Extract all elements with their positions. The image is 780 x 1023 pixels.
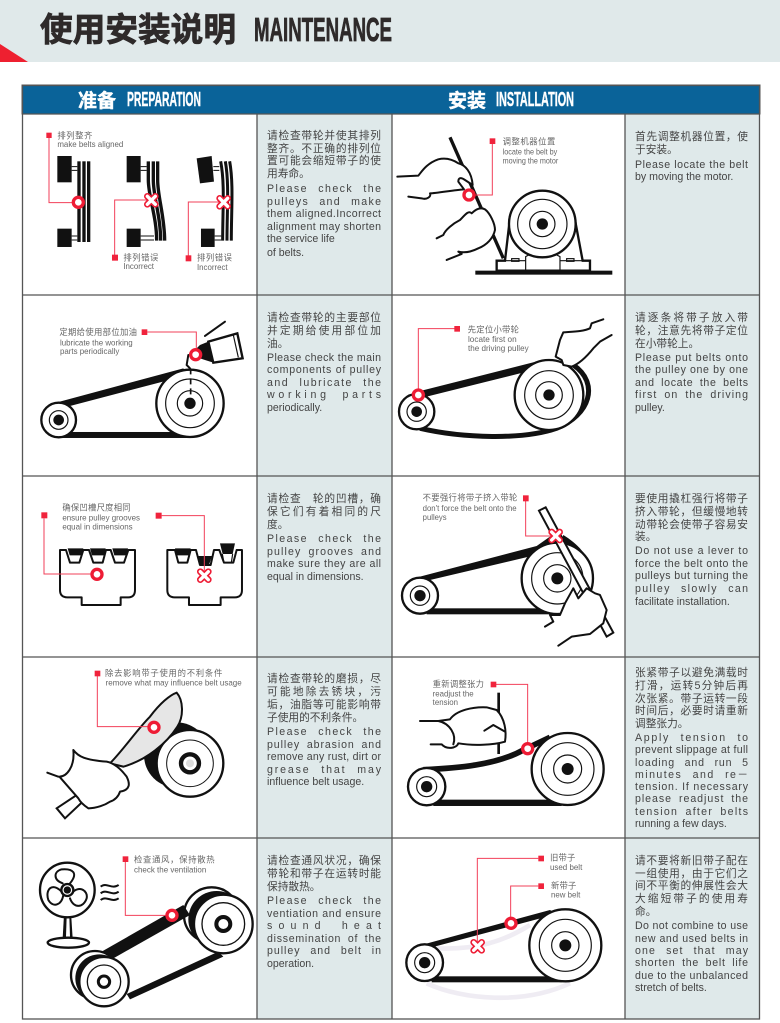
- callouts: new belt: [551, 890, 581, 900]
- belt and pulleys: [406, 909, 601, 982]
- text: installation step 4: tension after belts: [635, 806, 748, 818]
- text: preparation step 4: 请检查带轮的磨损，尽: [267, 672, 381, 685]
- callout: [95, 668, 242, 732]
- callouts: 旧带子: [550, 853, 575, 863]
- callout: don't force the belt onto the: [423, 503, 517, 513]
- text: preparation step 4: pulley abrasion and: [267, 739, 381, 751]
- text: installation step 4: loading and run 5: [635, 757, 748, 769]
- top banner: [0, 0, 780, 62]
- callout: [123, 855, 215, 920]
- belt and pulleys: [41, 368, 224, 438]
- text: installation step 3: 装。: [635, 530, 656, 543]
- text: installation step 3: [635, 492, 748, 608]
- upper hand: [397, 159, 473, 199]
- text: installation step 5: 大缩短带子的使用寿: [635, 892, 748, 905]
- heading: preparation: [78, 89, 201, 112]
- text: installation step 1: 于安装。: [635, 143, 678, 156]
- diagram: aligned: [57, 156, 90, 247]
- illustration: do not mix used and new belts: [406, 853, 601, 998]
- text: preparation step 5: Please check the: [267, 895, 381, 907]
- text: installation step 4: running a few days.: [635, 818, 727, 830]
- text: preparation step 4: influence belt usage.: [267, 776, 364, 788]
- text: installation step 5: new and used belts in: [635, 933, 748, 945]
- callout: readjust the: [433, 689, 474, 699]
- callout label: 排列整齐: [57, 131, 93, 141]
- hand and handle: [47, 750, 129, 818]
- text: preparation step 4: Please check the: [267, 726, 381, 738]
- red corner triangle: [0, 44, 28, 62]
- callout: 检查通风，保持散热: [134, 855, 215, 865]
- pulleys: [144, 722, 223, 797]
- illustration: make belts aligned: 排列错误: [197, 253, 233, 263]
- text: installation step 5: due to the unbalanced: [635, 970, 748, 982]
- text: installation step 5: 一组使用，由于它们之: [635, 867, 748, 880]
- text: installation step 4: 张紧带子以避免满载时: [635, 666, 748, 679]
- text: installation step 4: Apply tension to: [635, 732, 748, 744]
- text: preparation step 4: grease that may: [267, 764, 382, 776]
- text: preparation step 3: pulley grooves and: [267, 546, 381, 558]
- text: preparation step 5: dissemination of the: [267, 933, 381, 945]
- main title: MAINTENANCE: [254, 11, 392, 48]
- lower hand: [437, 208, 495, 260]
- text: installation step 5: 间不平衡的伸展性会大: [635, 879, 748, 892]
- text: installation step 4: please readjust the: [635, 793, 748, 805]
- text: preparation step 5: 保持散热。: [267, 880, 320, 893]
- belt and pulleys: [71, 887, 253, 1006]
- text: installation step 2: the pulley one by one: [635, 364, 748, 376]
- callouts: 确保凹槽尺度相同: [62, 503, 131, 513]
- text: installation step 1: by moving the motor.: [635, 171, 733, 183]
- callout: [423, 492, 560, 540]
- text: preparation step 2: 请检查带轮的主要部位: [267, 311, 381, 324]
- text: preparation step 3: [267, 492, 381, 583]
- fan: [40, 863, 95, 948]
- text: installation step 2: pulley.: [635, 402, 665, 414]
- text: preparation step 4: 垢，油脂等可能影响带: [267, 698, 381, 711]
- callout: locate the belt by: [503, 147, 558, 157]
- text: installation step 3: 挤入带轮，但缓慢地转: [635, 505, 748, 518]
- text: installation step 1: Please locate the belt: [635, 159, 748, 171]
- text: installation step 4: prevent slippage at full: [635, 744, 748, 756]
- callout: 调整机器位置: [503, 136, 555, 146]
- text: installation step 3: force the belt onto the: [635, 558, 748, 570]
- text: preparation step 2: Please check the main: [267, 352, 381, 364]
- text: installation step 4: 打滑，运转5分钟后再: [635, 679, 748, 692]
- correct groove section: [60, 548, 135, 605]
- illustration: remove what may influence belt usage: [47, 668, 242, 818]
- callout: moving the motor: [503, 155, 559, 165]
- text: installation step 5: 请不要将新旧带子配在: [635, 854, 748, 867]
- text: preparation step 1: of belts.: [267, 247, 304, 259]
- callout: tension: [433, 697, 458, 707]
- callout: 定期给使用部位加油: [59, 327, 137, 337]
- text: installation step 2: [635, 311, 748, 414]
- red callouts: [46, 133, 228, 261]
- text: preparation step 1: 置可能会缩短带子的使: [267, 154, 381, 167]
- illustration: locate belt by moving motor: [397, 136, 612, 275]
- abrasive disc: [110, 693, 182, 767]
- text: preparation step 1: 用寿命。: [267, 167, 310, 180]
- illustration: make belts aligned: Incorrect: [123, 261, 155, 271]
- text: preparation step 2: [266, 311, 382, 414]
- text: installation step 3: pulley slowly can: [635, 583, 748, 595]
- text: preparation step 4: 子使用的不利条件。: [267, 711, 363, 724]
- text: installation step 3: 动带轮会使带子容易安: [635, 518, 748, 531]
- diagram: offset pulley: [127, 156, 165, 247]
- belt and pulleys: [408, 733, 604, 806]
- text: installation step 4: 调整张力。: [635, 717, 688, 730]
- callout: check the ventilation: [134, 864, 207, 874]
- text: installation step 3: Do not use a lever to: [635, 545, 748, 557]
- text: installation step 5: one set that may: [635, 945, 749, 957]
- text: preparation step 3: 保它们有着相同的尺: [267, 505, 381, 518]
- illustration: make belts aligned: [46, 131, 233, 272]
- callouts: [41, 503, 208, 580]
- text: preparation step 4: remove any rust, dirt or: [267, 751, 381, 763]
- heading: installation: INSTALLATION: [496, 89, 574, 111]
- callouts: equal in dimensions: [62, 521, 133, 531]
- illustration: check the ventilation: [40, 855, 253, 1006]
- text: installation step 5: shorten the belt life: [635, 957, 748, 969]
- belt and pulleys: [402, 535, 593, 614]
- text: installation step 4: [635, 666, 749, 830]
- text: installation step 3: facilitate installation.: [635, 596, 730, 608]
- illustration: make belts aligned: 排列错误: [123, 253, 159, 263]
- text: installation step 1: 首先调整机器位置，使: [635, 130, 748, 143]
- text: installation step 2: 请逐条将带子放入带: [635, 311, 748, 324]
- heading: installation: [448, 89, 574, 112]
- text: preparation step 2: and lubricate the: [267, 377, 381, 389]
- text: preparation step 1: the service life: [267, 233, 335, 245]
- callout: [433, 679, 533, 754]
- callout: parts periodically: [60, 346, 120, 356]
- text: installation step 2: 在小带轮上。: [635, 337, 699, 350]
- text: preparation step 1: pulleys and make: [267, 196, 381, 208]
- text: preparation step 2: 油。: [267, 337, 288, 350]
- text: installation step 1: [635, 130, 748, 183]
- table header bar: [22, 85, 760, 114]
- text: preparation step 2: components of pulley: [267, 364, 382, 376]
- belt and pulleys: [399, 360, 589, 436]
- text: installation step 3: 要使用撬杠强行将带子: [635, 492, 748, 505]
- old belt ghost: [427, 925, 570, 998]
- lever: [450, 137, 503, 258]
- illustration: readjust the tension: [408, 679, 604, 806]
- callouts: used belt: [550, 862, 583, 872]
- text: preparation step 3: Please check the: [267, 533, 381, 545]
- callouts: ensure pulley grooves: [62, 512, 140, 522]
- callout: pulleys: [423, 512, 447, 522]
- illustration: make belts aligned: Incorrect: [197, 262, 228, 272]
- text: installation step 5: [635, 854, 749, 994]
- text: preparation step 3: make sure they are all: [267, 558, 381, 570]
- text: installation step 3: pulleys but turning the: [635, 570, 748, 582]
- heading: preparation: 准备: [78, 90, 116, 112]
- diagram: tilted pulley: [197, 156, 232, 247]
- text: preparation step 1: them aligned.Incorrect: [267, 208, 381, 220]
- illustration: locate first on driving pulley: [399, 319, 612, 436]
- lever: [539, 507, 613, 637]
- text: installation step 2: and locate the belts: [635, 377, 748, 389]
- text: installation step 5: Do not combine to use: [635, 920, 748, 932]
- text: installation step 2: Please put belts onto: [635, 352, 748, 364]
- illustration: do not force belt with lever: [402, 492, 613, 646]
- hand: [545, 588, 607, 646]
- text: preparation step 1: 请检查带轮并使其排列: [267, 129, 381, 142]
- callout: lubricate the working: [60, 337, 133, 347]
- text: preparation step 4: 可能地除去锈块，污: [267, 685, 381, 698]
- main title: [40, 11, 392, 48]
- callout: 不要强行将带子挤入带轮: [423, 492, 517, 502]
- text: preparation step 5: sound heat: [267, 920, 381, 932]
- text: preparation step 2: periodically.: [267, 402, 322, 414]
- text: preparation step 1: [267, 129, 381, 259]
- callout label: [57, 131, 124, 149]
- text: preparation step 3: equal in dimensions.: [267, 571, 364, 583]
- callouts: [474, 853, 583, 950]
- callout: [464, 136, 559, 200]
- text: preparation step 5: pulley and belt in: [267, 945, 381, 957]
- callout label: make belts aligned: [57, 139, 124, 149]
- text: installation step 2: 轮，注意先将带子定位: [635, 324, 748, 337]
- text: preparation step 4: [267, 672, 382, 788]
- text: installation step 5: 命。: [635, 905, 656, 918]
- text: installation step 2: first on the driving: [635, 389, 748, 401]
- heading: installation: 安装: [448, 90, 486, 112]
- callout: locate first on: [468, 334, 517, 344]
- callout: 重新调整张力: [433, 679, 484, 689]
- oil can: [187, 322, 243, 368]
- hand and gauge: [420, 693, 506, 754]
- text: preparation step 5: ventiation and ensure: [267, 908, 381, 920]
- illustration: lubricate working parts: [41, 322, 243, 438]
- heading: preparation: PREPARATION: [127, 89, 201, 111]
- callout: the driving pulley: [468, 343, 529, 353]
- callout: [413, 324, 529, 400]
- text: preparation step 1: 整齐。不正确的排列位: [267, 142, 381, 155]
- motor: [475, 191, 612, 275]
- text: preparation step 5: operation.: [267, 958, 314, 970]
- air waves: [101, 885, 119, 900]
- callout: [59, 327, 201, 360]
- text: preparation step 2: working parts: [266, 389, 381, 401]
- text: installation step 4: 次张紧。带子运转一段: [635, 692, 748, 705]
- text: preparation step 1: Please check the: [267, 183, 381, 195]
- text: installation step 5: stretch of belts.: [635, 982, 707, 994]
- text: preparation step 3: 请检查 轮的凹槽，确: [267, 492, 381, 505]
- callout: 除去影响带子使用的不利条件: [105, 668, 222, 678]
- text: preparation step 5: [267, 854, 381, 970]
- main title: 使用安装说明: [40, 11, 236, 48]
- text: installation step 4: 时间后，必要时请重新: [635, 704, 748, 717]
- text: preparation step 2: 并定期给使用部位加: [267, 324, 381, 337]
- text: installation step 4: minutes and re－: [635, 769, 748, 781]
- text: preparation step 3: 度。: [267, 518, 288, 531]
- text: preparation step 5: 请检查通风状况，确保: [267, 854, 381, 867]
- text: preparation step 5: 带轮和带子在运转时能: [267, 867, 381, 880]
- callout: remove what may influence belt usage: [106, 678, 242, 688]
- incorrect groove section: [167, 543, 242, 605]
- hand: [556, 319, 612, 367]
- callout: 先定位小带轮: [468, 324, 519, 334]
- text: installation step 4: tension. If necessary: [635, 781, 749, 793]
- text: preparation step 1: alignment may shorten: [267, 221, 381, 233]
- callouts: 新带子: [551, 880, 576, 890]
- illustration: equal pulley grooves: [41, 503, 242, 605]
